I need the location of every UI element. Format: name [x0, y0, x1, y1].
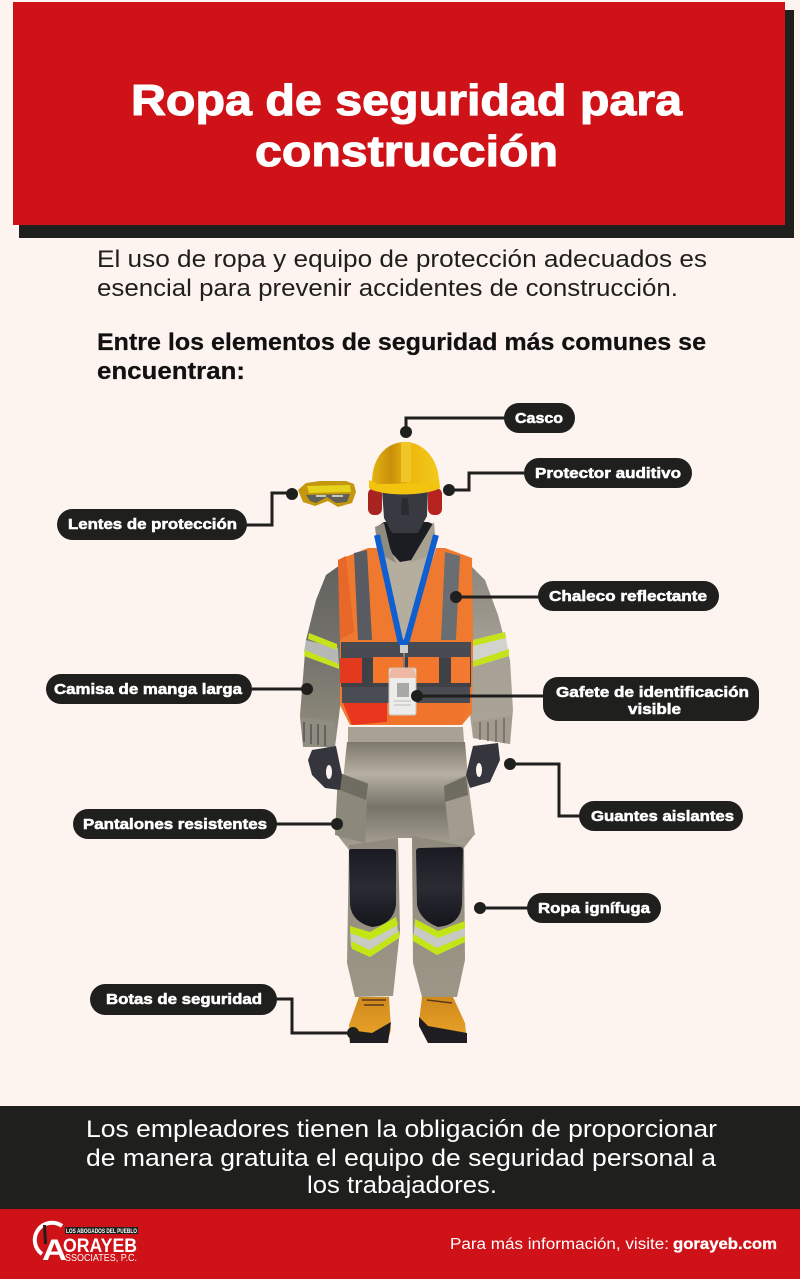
logo: SSOCIATES, P.C. — [65, 1253, 137, 1264]
logo: ORAYEB — [63, 1236, 137, 1257]
employer obligation band: Los empleadores tienen la obligación de proporcionar — [86, 1116, 717, 1143]
lanyard — [377, 535, 436, 668]
subheading — [97, 329, 706, 385]
jacket sleeves — [300, 565, 513, 748]
hard hat — [369, 442, 440, 494]
icon: safety goggles — [298, 481, 356, 507]
website note: gorayeb.com — [673, 1236, 777, 1253]
label: Gafete de identificación visible: visible — [628, 701, 681, 718]
label: Camisa de manga larga: Camisa de manga larga — [54, 681, 243, 698]
logo: A — [42, 1234, 67, 1267]
website note: Para más información, visite: — [450, 1236, 669, 1253]
id badge — [389, 668, 416, 715]
leg reflective bands — [350, 917, 465, 957]
label: Lentes de protección — [57, 488, 298, 540]
collar and shirt — [375, 522, 436, 640]
label: Casco: Casco — [515, 410, 563, 427]
employer obligation band: de manera gratuita el equipo de seguridad personal a — [86, 1145, 717, 1172]
label: Lentes de protección: Lentes de protección — [68, 516, 237, 533]
intro paragraph — [97, 246, 707, 302]
label: Botas de seguridad: Botas de seguridad — [106, 991, 262, 1008]
logo: LOS ABOGADOS DEL PUEBLO — [66, 1228, 137, 1235]
knee pads — [349, 847, 463, 927]
label: Gafete de identificación visible — [411, 677, 759, 721]
trousers — [335, 742, 475, 997]
label: Botas de seguridad — [90, 984, 359, 1039]
sleeve reflective bands — [304, 632, 509, 669]
subheading: encuentran: — [97, 358, 245, 385]
boots — [349, 997, 467, 1043]
label: Protector auditivo: Protector auditivo — [535, 465, 681, 482]
label: Pantalones resistentes: Pantalones resistentes — [83, 816, 267, 833]
title: construcción — [255, 127, 558, 176]
employer obligation band: los trabajadores. — [307, 1172, 497, 1199]
label: Casco — [400, 403, 575, 438]
label: Ropa ignífuga — [474, 893, 661, 923]
label: Camisa de manga larga — [46, 674, 313, 704]
label: Guantes aislantes: Guantes aislantes — [591, 808, 734, 825]
safety vest — [338, 548, 473, 725]
label: Pantalones resistentes — [73, 809, 343, 839]
subheading: Entre los elementos de seguridad más comunes se — [97, 329, 706, 356]
label: Gafete de identificación visible: Gafete de identificación — [556, 684, 749, 701]
intro paragraph: El uso de ropa y equipo de protección adecuados es — [97, 246, 707, 273]
website note — [450, 1236, 777, 1253]
title — [131, 76, 683, 176]
worker figure — [300, 442, 513, 1043]
label: Chaleco reflectante: Chaleco reflectante — [549, 588, 707, 605]
belt and shirt hem — [348, 727, 464, 742]
ear protectors — [368, 488, 442, 515]
label: Protector auditivo — [443, 458, 692, 496]
label: Ropa ignífuga: Ropa ignífuga — [538, 900, 651, 917]
logo — [35, 1223, 138, 1267]
label: Guantes aislantes — [504, 758, 743, 831]
title: Ropa de seguridad para — [131, 76, 683, 125]
head — [382, 490, 428, 533]
intro paragraph: esencial para prevenir accidentes de construcción. — [97, 275, 678, 302]
employer obligation band — [0, 1106, 800, 1209]
footer bar — [0, 1209, 800, 1279]
label: Chaleco reflectante — [450, 581, 719, 611]
header banner — [13, 2, 794, 238]
gloves — [308, 743, 500, 790]
